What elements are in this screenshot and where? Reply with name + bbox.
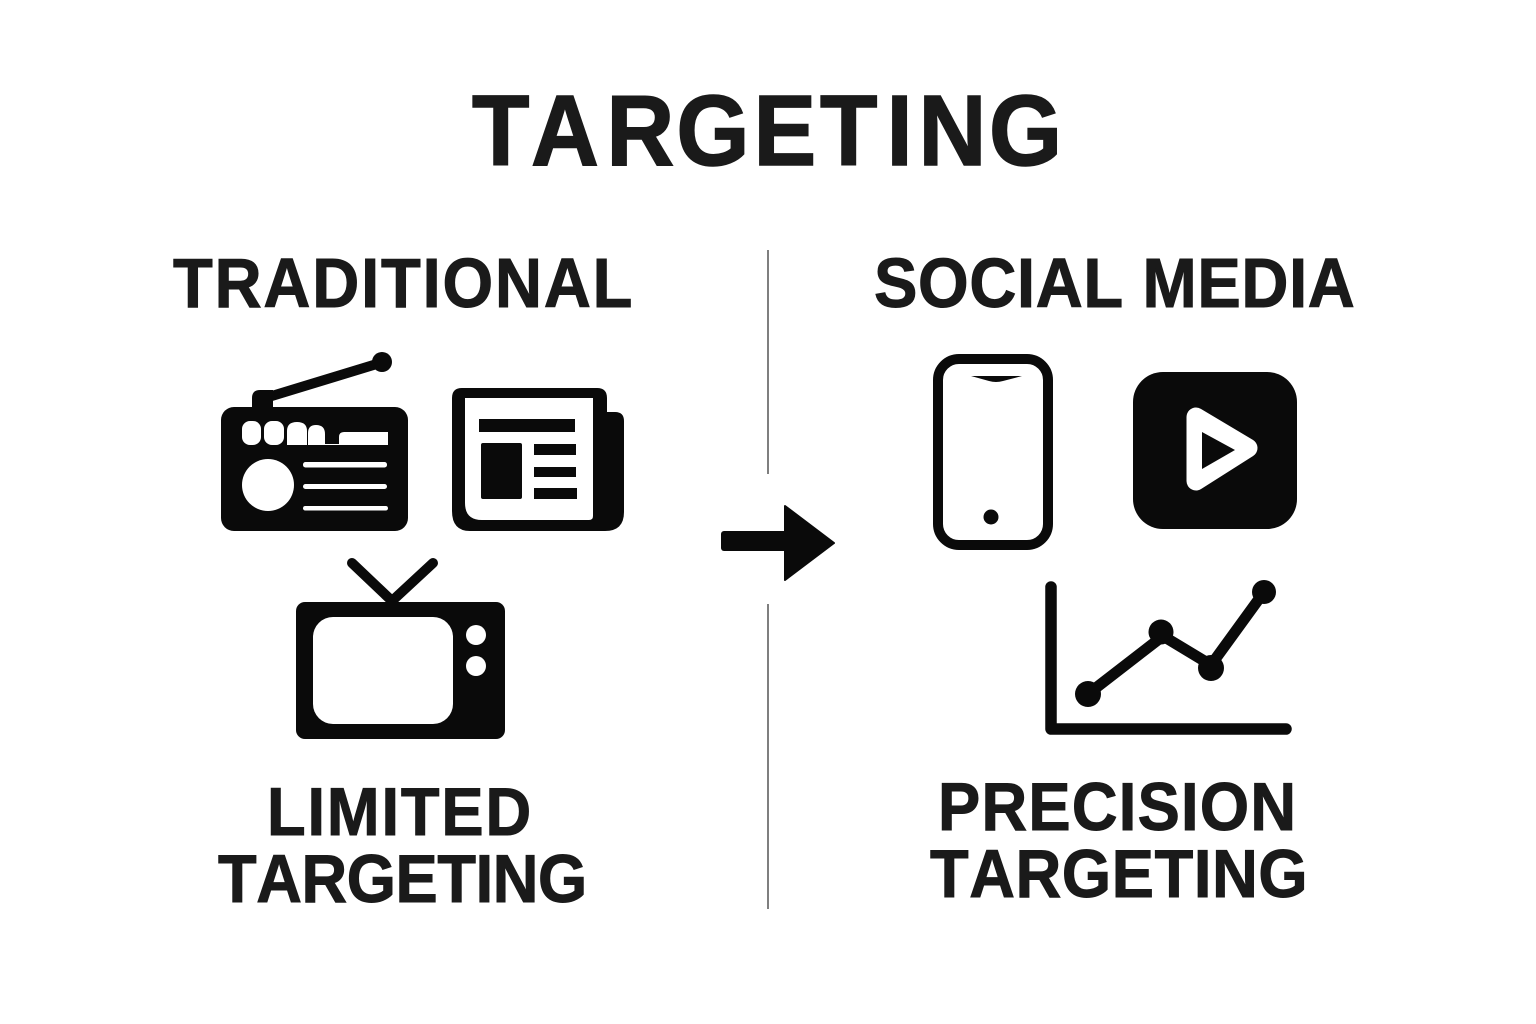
caption: limited targeting (218, 774, 587, 916)
icon: radio (221, 352, 408, 531)
caption: limited targeting: TARGETING (218, 841, 587, 916)
caption: limited targeting: LIMITED (267, 774, 531, 849)
caption: precision targeting: PRECISION (938, 769, 1296, 844)
caption: precision targeting: TARGETING (930, 836, 1308, 911)
center divider (767, 250, 769, 909)
icon: newspaper (452, 388, 624, 531)
arrow (721, 506, 834, 580)
heading: traditional: TRADITIONAL (173, 245, 632, 323)
icon: video play (1133, 372, 1297, 529)
title: TARGETING (472, 74, 1062, 187)
icon: smartphone (938, 359, 1048, 545)
heading: social media: SOCIAL MEDIA (874, 245, 1355, 323)
caption: precision targeting (930, 769, 1308, 911)
icon: television (296, 563, 505, 739)
icon: line chart (1051, 580, 1286, 729)
